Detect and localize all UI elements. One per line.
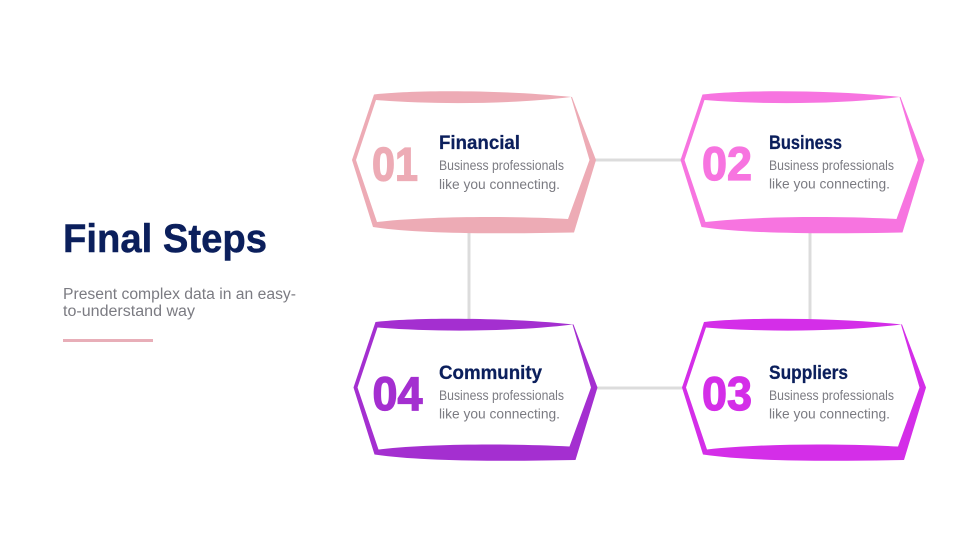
description 03: Business professionals <box>769 388 894 403</box>
number 01: 01 <box>372 138 418 190</box>
number 02: 02 <box>702 137 752 190</box>
heading Community: Community <box>439 362 542 384</box>
description 04: Business professionals <box>439 388 564 403</box>
description 01 <box>439 158 564 192</box>
heading Financial: Financial <box>439 132 520 154</box>
description 01: like you connecting. <box>439 177 560 192</box>
heading Suppliers: Suppliers <box>769 362 848 384</box>
description 04: like you connecting. <box>439 406 560 422</box>
heading Business: Business <box>769 132 842 154</box>
hexagon frame 02 <box>680 91 924 233</box>
description 02: like you connecting. <box>769 176 890 192</box>
panel: 03 Suppliers <box>682 319 926 461</box>
connectors <box>468 158 812 390</box>
panel: 04 Community <box>354 319 598 461</box>
subtitle text <box>63 286 296 320</box>
description 03 <box>769 388 894 422</box>
description 03: like you connecting. <box>769 406 890 422</box>
hexagon frame 03 <box>682 319 926 461</box>
panel: 02 Business <box>680 91 924 233</box>
title: Final Steps <box>63 217 267 261</box>
description 02 <box>769 158 894 192</box>
description 01: Business professionals <box>439 158 564 173</box>
description 04 <box>439 388 564 422</box>
panel: 01 Financial <box>352 91 596 233</box>
subtitle text: to-understand way <box>63 303 195 320</box>
accent underline <box>63 339 153 342</box>
hexagon frame 04 <box>354 319 598 461</box>
number 03: 03 <box>702 367 752 420</box>
hexagon frame 01 <box>352 91 596 233</box>
subtitle text: Present complex data in an easy- <box>63 286 296 303</box>
number 04: 04 <box>372 367 422 420</box>
description 02: Business professionals <box>769 158 894 173</box>
